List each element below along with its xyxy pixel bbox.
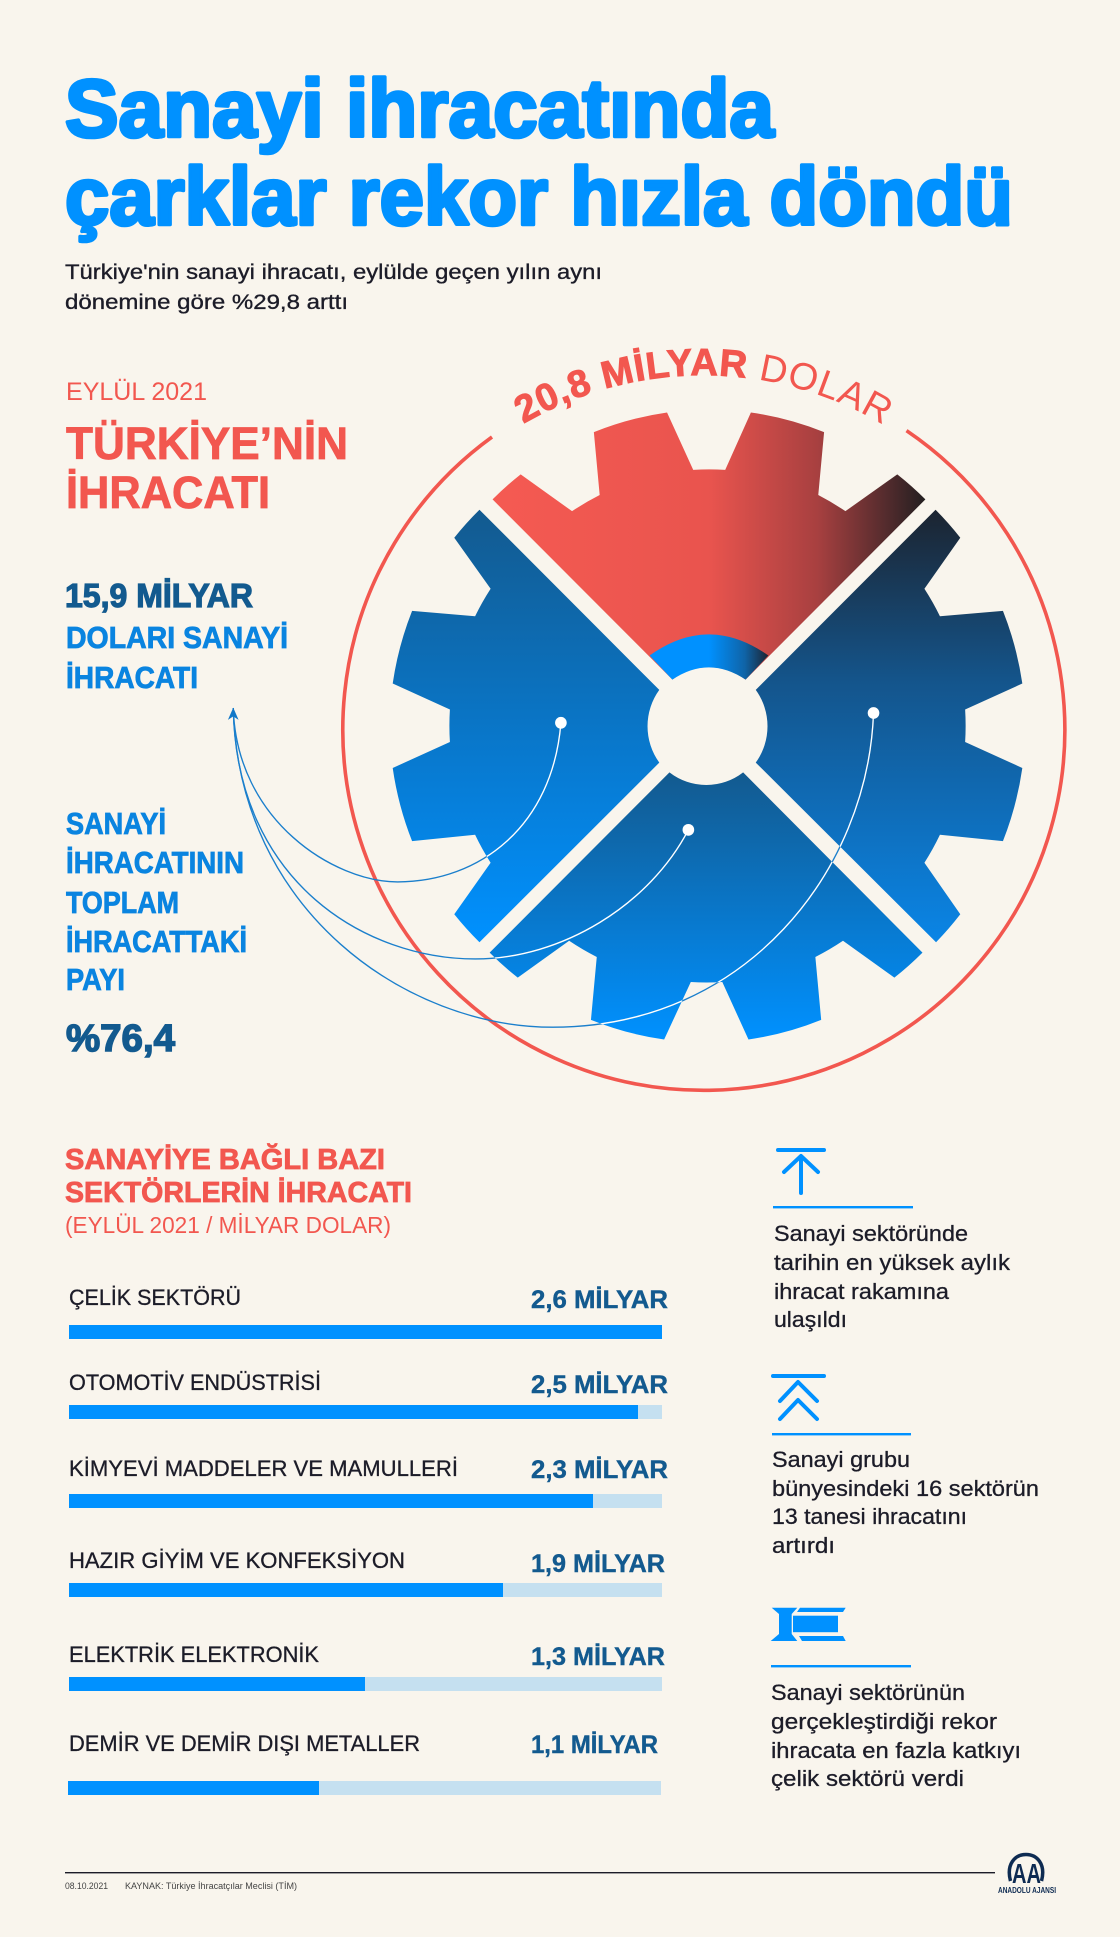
note 1: tarihin en yüksek aylık <box>774 1250 1011 1275</box>
title: çarklar rekor hızla döndü <box>65 152 1013 242</box>
ring around gear <box>343 431 1065 1090</box>
bar row: hazır giyim <box>69 1548 665 1597</box>
bar row: elektrik: ELEKTRİK ELEKTRONİK <box>69 1642 319 1667</box>
bar row: çelik: 2,6 MİLYAR <box>531 1286 668 1314</box>
leader lines outside gear (blue) <box>233 708 874 1027</box>
sector heading: SEKTÖRLERİN İHRACATI <box>65 1176 412 1209</box>
callout: toplam ihracattaki pay: İHRACATININ <box>66 845 244 880</box>
gear chart <box>228 412 1022 1039</box>
note 2 <box>772 1376 1039 1558</box>
note 3: Sanayi sektörünün <box>771 1680 965 1705</box>
footer source: 08.10.2021 <box>65 1881 108 1891</box>
bar row: elektrik <box>69 1642 665 1691</box>
logo: Anadolu Ajansı: ANADOLU AJANSI <box>998 1885 1056 1895</box>
bar row: demir <box>68 1731 661 1795</box>
bar row: demir: 1,1 MİLYAR <box>531 1731 658 1759</box>
callout: toplam ihracattaki pay: PAYI <box>66 962 125 997</box>
note 1: ihracat rakamına <box>774 1279 950 1304</box>
bar chart: sectors <box>68 1285 668 1795</box>
note 3 <box>771 1608 1021 1791</box>
subtitle <box>65 261 602 314</box>
heading: Türkiye'nin ihracatı: EYLÜL 2021 <box>66 378 207 406</box>
subtitle: dönemine göre %29,8 arttı <box>65 291 348 314</box>
note 2: Sanayi grubu <box>772 1447 910 1472</box>
note 3: gerçekleştirdiği rekor <box>771 1709 997 1734</box>
leader dots <box>555 707 879 836</box>
gear: blue band in red quadrant <box>650 634 768 680</box>
logo: Anadolu Ajansı <box>998 1854 1056 1895</box>
note 3: çelik sektörü verdi <box>771 1766 964 1791</box>
gear: non-industry share (red) <box>493 412 925 680</box>
title <box>65 64 1013 242</box>
bar row: otomotiv <box>69 1370 668 1419</box>
callout: toplam ihracattaki pay: SANAYİ <box>66 806 166 841</box>
bar row: elektrik: 1,3 MİLYAR <box>531 1643 665 1671</box>
bar row: demir: DEMİR VE DEMİR DIŞI METALLER <box>69 1731 420 1756</box>
bar row: hazır giyim: 1,9 MİLYAR <box>531 1550 665 1578</box>
callout: toplam ihracattaki pay: İHRACATTAKİ <box>66 924 247 959</box>
leader lines inside gear (white) <box>486 718 874 1024</box>
bar row: hazır giyim: HAZIR GİYİM VE KONFEKSİYON <box>69 1548 405 1573</box>
note 1: ulaşıldı <box>774 1307 847 1332</box>
note 2: 13 tanesi ihracatını <box>772 1504 967 1529</box>
sector heading <box>65 1142 412 1238</box>
heading: Türkiye'nin ihracatı: TÜRKİYE’NİN <box>66 418 348 469</box>
heading: Türkiye'nin ihracatı: İHRACATI <box>66 467 270 518</box>
gear: bottom quadrant <box>490 772 922 1039</box>
heading: Türkiye'nin ihracatı <box>66 378 348 518</box>
title: Sanayi ihracatında <box>65 64 775 154</box>
bar row: kimyevi: 2,3 MİLYAR <box>531 1456 668 1484</box>
arrow: leader head <box>228 708 239 720</box>
footer rule <box>65 1872 995 1873</box>
note 2: bünyesindeki 16 sektörün <box>772 1476 1039 1501</box>
callout: sanayi ihracatı: 15,9 MİLYAR <box>65 577 253 614</box>
bar row: otomotiv: 2,5 MİLYAR <box>531 1371 668 1399</box>
footer source: KAYNAK: Türkiye İhracatçılar Meclisi (TİM) <box>125 1881 297 1891</box>
gear: right quadrant <box>756 510 1022 942</box>
subtitle: Türkiye'nin sanayi ihracatı, eylülde geçen yılın aynı <box>65 261 602 284</box>
bar row: kimyevi <box>69 1456 668 1508</box>
icon: arrow to top <box>778 1150 824 1193</box>
callout: sanayi ihracatı: DOLARI SANAYİ <box>66 620 288 655</box>
bar row: çelik <box>69 1285 668 1339</box>
callout: sanayi ihracatı <box>65 577 288 695</box>
note 2: artırdı <box>772 1533 835 1558</box>
gear: left quadrant <box>393 510 659 942</box>
callout: toplam ihracattaki pay: %76,4 <box>66 1018 175 1060</box>
ring label: 20,8 milyar dolar: 20,8 MİLYAR DOLAR <box>514 347 891 424</box>
note 1 <box>773 1150 1011 1332</box>
bar row: kimyevi: KİMYEVİ MADDELER VE MAMULLERİ <box>69 1456 458 1481</box>
bar row: otomotiv: OTOMOTİV ENDÜSTRİSİ <box>69 1370 321 1395</box>
icon: double chevron up <box>773 1376 824 1419</box>
bar row: çelik: ÇELİK SEKTÖRÜ <box>69 1285 241 1310</box>
note 1: Sanayi sektöründe <box>774 1221 968 1246</box>
sector heading: (EYLÜL 2021 / MİLYAR DOLAR) <box>65 1212 391 1238</box>
icon: steel beam <box>771 1608 846 1641</box>
callout: sanayi ihracatı: İHRACATI <box>66 660 198 695</box>
sector heading: SANAYİYE BAĞLI BAZI <box>65 1142 385 1176</box>
callout: toplam ihracattaki pay <box>66 806 247 1060</box>
callout: toplam ihracattaki pay: TOPLAM <box>66 885 179 920</box>
logo: Anadolu Ajansı: AA <box>1012 1858 1041 1889</box>
note 3: ihracata en fazla katkıyı <box>771 1738 1021 1763</box>
